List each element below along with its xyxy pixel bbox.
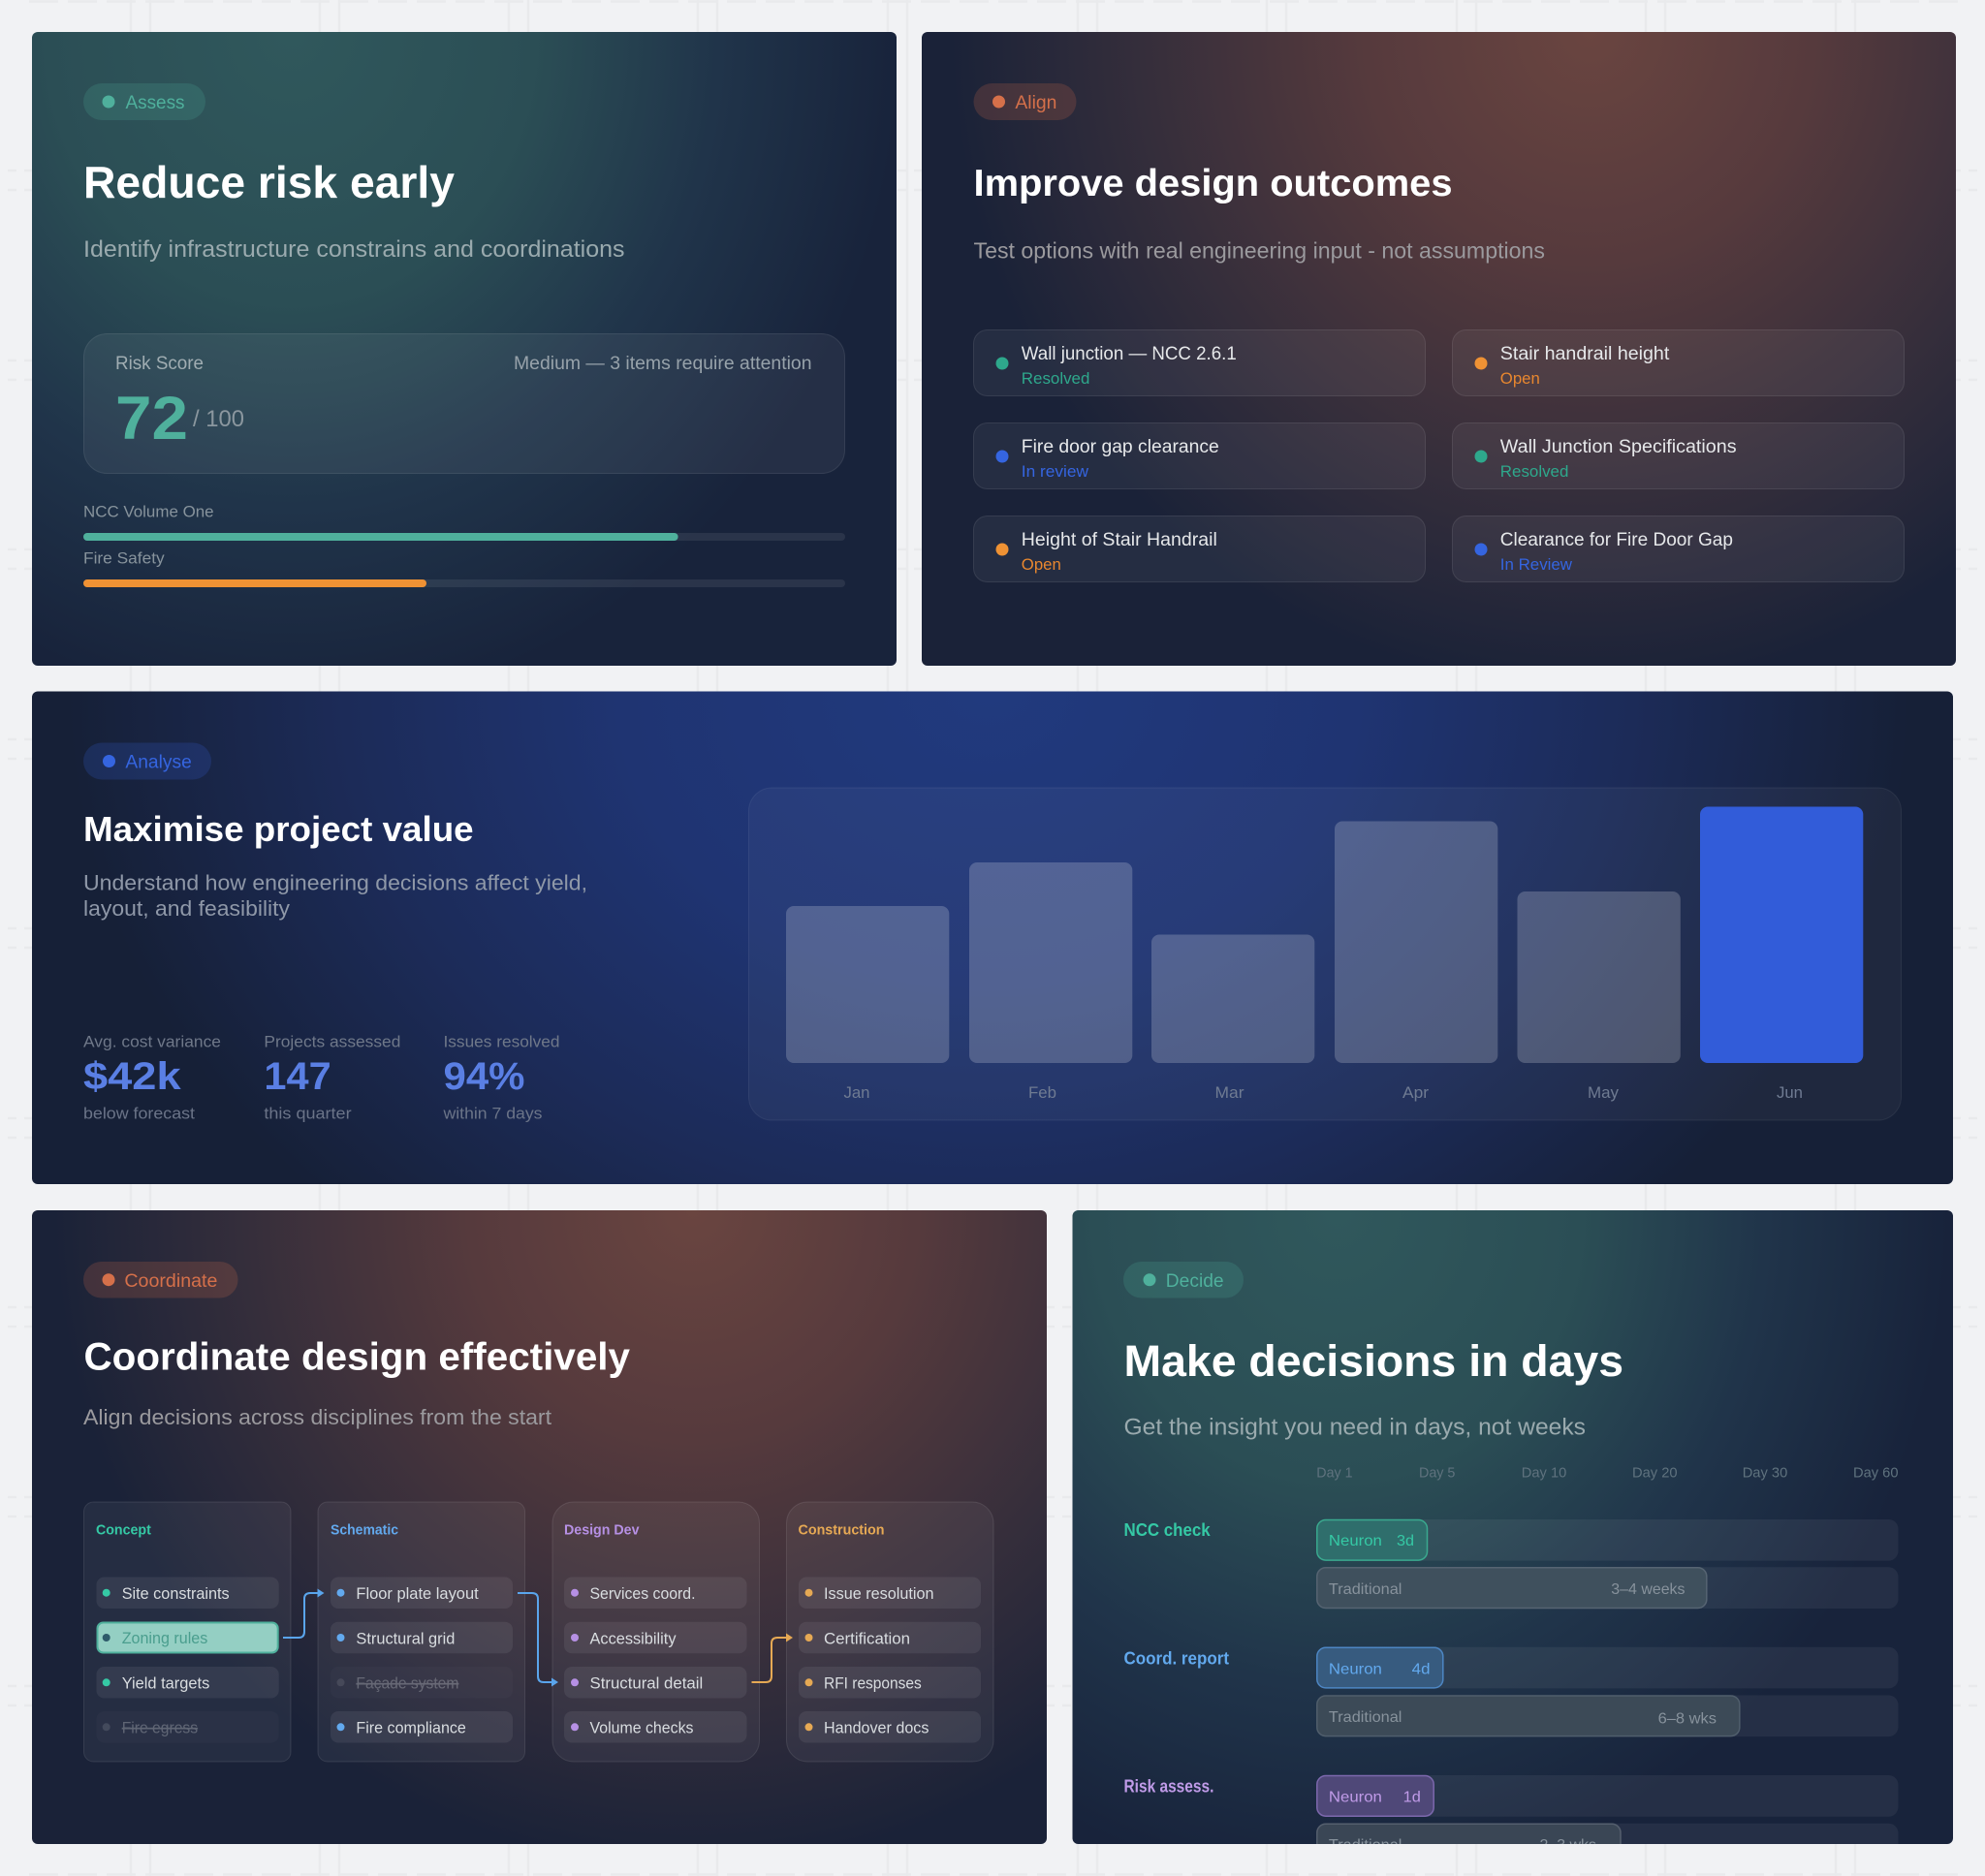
step: Structural grid: Structural grid — [356, 1630, 455, 1648]
item: Clearance for Fire Door Gap: In Review — [1500, 555, 1573, 574]
step: Zoning rules (active) — [97, 1622, 278, 1653]
step: Floor plate layout: Floor plate layout — [356, 1584, 479, 1603]
heading: Improve design outcomes — [973, 163, 1452, 204]
step: Services coord.: Services coord. — [589, 1584, 696, 1603]
column: Schematic — [318, 1502, 525, 1762]
bar: Neuron 4d: 4d — [1412, 1661, 1431, 1677]
panel: Assess — [32, 32, 897, 666]
axis labels: Feb — [1028, 1083, 1056, 1102]
risk score card: Risk Score — [115, 354, 204, 374]
axis labels — [843, 1083, 1803, 1102]
timeline axis: Day 5 — [1419, 1465, 1455, 1481]
stat: projects assessed: this quarter — [264, 1105, 352, 1122]
bar: Traditional 3–4 weeks: 3–4 weeks — [1611, 1581, 1685, 1598]
pill: Assess — [83, 83, 205, 120]
pill: Assess: Assess — [126, 93, 184, 113]
item: Clearance for Fire Door Gap: Clearance for Fire Door Gap — [1500, 530, 1733, 550]
timeline axis: Day 20 — [1632, 1465, 1678, 1481]
row: Coord. report: Coord. report — [1124, 1649, 1229, 1669]
subheading: Identify infrastructure constrains and coordinations — [83, 236, 624, 263]
risk score card: / 100 — [193, 406, 244, 432]
bar: Neuron 3d: 3d — [1397, 1533, 1414, 1549]
timeline axis: Day 30 — [1743, 1465, 1787, 1481]
bar: Traditional 2–3 wks: 2–3 wks — [1539, 1837, 1596, 1854]
item: Wall junction: Resolved — [1022, 369, 1089, 388]
column: Design Dev: Design Dev — [564, 1521, 640, 1539]
step: Structural detail: Structural detail — [589, 1674, 703, 1693]
timeline axis — [1318, 1467, 1898, 1481]
item: Height of Stair Handrail: Height of Stair Handrail — [1022, 530, 1217, 550]
stat: cost variance — [83, 1033, 221, 1122]
progress: Fire Safety: Fire Safety — [83, 548, 165, 568]
description: Understand how engineering decisions affect yield, — [83, 871, 587, 895]
stat: projects assessed: 147 — [264, 1055, 331, 1098]
pill: Align — [973, 83, 1076, 120]
item: Fire door gap clearance: In review — [1022, 462, 1089, 481]
arrow: Zoning rules to Floor plate layout — [283, 1589, 324, 1638]
step: Handover docs: Handover docs — [824, 1719, 929, 1737]
bar: Neuron 1d: 1d — [1403, 1789, 1421, 1806]
arrow: Floor plate layout to Structural detail — [518, 1593, 558, 1686]
pill: Analyse: Analyse — [125, 752, 192, 773]
panel: Analyse — [32, 692, 1953, 1184]
description: layout, and feasibility — [83, 896, 291, 921]
pill: Analyse — [83, 742, 211, 779]
pill: Decide — [1123, 1262, 1244, 1298]
risk score card: Medium — 3 items require attention — [514, 354, 812, 374]
row: NCC check — [1124, 1519, 1898, 1609]
subheading: Get the insight you need in days, not weeks — [1124, 1415, 1586, 1440]
item: Wall Junction Specifications: Wall Junction Specifications — [1500, 437, 1737, 457]
step: Façade system (disabled) — [331, 1667, 513, 1698]
step: Certification: Certification — [824, 1630, 910, 1648]
pill: Align: Align — [1015, 93, 1056, 113]
arrow: Structural detail to Certification — [752, 1634, 793, 1682]
step: RFI responses — [799, 1667, 981, 1698]
subheading: Test options with real engineering input - not assumptions — [973, 238, 1545, 264]
stat: projects assessed — [264, 1033, 400, 1122]
timeline axis: Day 1 — [1316, 1465, 1353, 1481]
progress: NCC Volume One — [83, 502, 845, 541]
bar: Traditional 2–3 wks: Traditional — [1329, 1837, 1402, 1854]
step: Zoning rules (active): Zoning rules — [122, 1629, 207, 1647]
bar: Neuron 1d — [1317, 1775, 1434, 1816]
bar: Jan — [786, 906, 949, 1063]
item: Wall Junction Specifications: Resolved — [1500, 462, 1568, 481]
bar: Traditional 6–8 wks: Traditional — [1329, 1709, 1402, 1726]
subheading: Align decisions across disciplines from the start — [83, 1405, 551, 1429]
stat: cost variance: below forecast — [83, 1105, 195, 1122]
step: Volume checks — [564, 1711, 746, 1742]
step: Issue resolution — [799, 1578, 981, 1609]
panel: Decide — [1072, 1210, 1953, 1864]
item: Clearance for Fire Door Gap — [1452, 516, 1904, 581]
step: Structural grid — [331, 1622, 513, 1653]
bar: Traditional 3–4 weeks: Traditional — [1329, 1581, 1402, 1598]
step: Accessibility — [564, 1622, 746, 1653]
bar: Mar — [1151, 934, 1314, 1063]
row: NCC check: NCC check — [1124, 1520, 1212, 1540]
item: Wall Junction Specifications — [1452, 422, 1904, 488]
step: Issue resolution: Issue resolution — [824, 1584, 934, 1603]
bar: Neuron 3d — [1317, 1519, 1427, 1560]
pill: Coordinate: Coordinate — [124, 1271, 217, 1292]
step: Yield targets: Yield targets — [122, 1674, 209, 1693]
row: Risk assess. — [1124, 1775, 1898, 1844]
progress: Fire Safety — [83, 548, 845, 587]
bar: Apr — [1335, 822, 1497, 1063]
stat: projects assessed: Projects assessed — [264, 1033, 400, 1050]
step: Structural detail — [564, 1667, 746, 1698]
step: Accessibility: Accessibility — [589, 1630, 677, 1648]
item: Stair handrail height: Stair handrail height — [1500, 344, 1670, 364]
bar chart — [748, 788, 1902, 1120]
bar: Feb — [969, 862, 1132, 1063]
stat: issues resolved: within 7 days — [442, 1105, 543, 1122]
step: Fire egress (disabled): Fire egress — [122, 1719, 198, 1737]
pill: Coordinate — [83, 1262, 238, 1298]
panel: Coordinate — [32, 1210, 1047, 1844]
pill: Decide: Decide — [1166, 1271, 1224, 1292]
step: Yield targets — [97, 1667, 279, 1698]
bar: Jun — [1700, 806, 1863, 1063]
stat: issues resolved: 94% — [444, 1055, 525, 1098]
step: Site constraints — [97, 1578, 279, 1609]
bar: Neuron 4d: Neuron — [1329, 1661, 1382, 1677]
item: Stair handrail height: Open — [1500, 369, 1540, 388]
item: Wall junction: Wall junction — NCC 2.6.1 — [1022, 344, 1237, 364]
bar: May — [1518, 891, 1681, 1063]
axis labels: Apr — [1402, 1083, 1429, 1102]
column: Concept: Concept — [96, 1521, 151, 1539]
row: Risk assess.: Risk assess. — [1124, 1777, 1213, 1797]
column: Concept — [83, 1502, 291, 1762]
axis labels: Mar — [1215, 1083, 1245, 1102]
risk score card: 72 — [115, 385, 188, 453]
progress: NCC Volume One: NCC Volume One — [83, 502, 214, 521]
item: Height of Stair Handrail: Open — [1022, 555, 1061, 574]
step: Façade system (disabled): Façade system — [356, 1674, 458, 1693]
step: Fire egress (disabled) — [97, 1711, 279, 1742]
timeline axis: Day 10 — [1522, 1465, 1566, 1481]
axis labels: May — [1588, 1083, 1619, 1102]
description — [83, 871, 587, 921]
step: Floor plate layout — [331, 1578, 513, 1609]
heading: Maximise project value — [83, 809, 474, 849]
bar: Traditional 6–8 wks — [1317, 1696, 1740, 1736]
bar: Traditional 6–8 wks: 6–8 wks — [1658, 1711, 1717, 1727]
heading: Make decisions in days — [1124, 1336, 1623, 1386]
item: Stair handrail height — [1452, 329, 1904, 395]
bar: Neuron 4d — [1317, 1647, 1443, 1688]
item: Height of Stair Handrail — [973, 516, 1425, 581]
risk score card — [83, 333, 845, 473]
item: Fire door gap clearance — [973, 422, 1425, 488]
heading: Coordinate design effectively — [83, 1335, 631, 1378]
panel: Align — [922, 32, 1956, 666]
step: RFI responses: RFI responses — [824, 1674, 922, 1693]
step: Certification — [799, 1622, 981, 1653]
step: Services coord. — [564, 1578, 746, 1609]
axis labels: Jun — [1777, 1083, 1803, 1102]
item: Wall junction — [973, 329, 1425, 395]
step: Volume checks: Volume checks — [589, 1719, 694, 1737]
heading: Reduce risk early — [83, 157, 455, 207]
row: Coord. report — [1124, 1647, 1898, 1736]
stat: cost variance: Avg. cost variance — [83, 1033, 221, 1050]
stat: issues resolved — [442, 1033, 560, 1122]
column: Construction: Construction — [799, 1521, 884, 1539]
bar: Traditional 2–3 wks — [1316, 1824, 1622, 1844]
step: Fire compliance: Fire compliance — [356, 1719, 466, 1737]
step: Handover docs — [799, 1711, 981, 1742]
step: Fire compliance — [331, 1711, 513, 1742]
timeline axis: Day 60 — [1853, 1465, 1898, 1481]
bar: Traditional 3–4 weeks — [1317, 1568, 1707, 1609]
step: Site constraints: Site constraints — [122, 1584, 230, 1603]
stat: cost variance: $42k — [83, 1055, 181, 1098]
bar: Neuron 1d: Neuron — [1329, 1789, 1382, 1806]
bar: Neuron 3d: Neuron — [1329, 1533, 1382, 1549]
column: Design Dev — [552, 1502, 760, 1762]
axis labels: Jan — [843, 1083, 870, 1102]
stat: issues resolved: Issues resolved — [444, 1033, 560, 1050]
column: Construction — [787, 1502, 993, 1762]
column: Schematic: Schematic — [331, 1521, 398, 1539]
item: Fire door gap clearance: Fire door gap clearance — [1022, 437, 1219, 457]
